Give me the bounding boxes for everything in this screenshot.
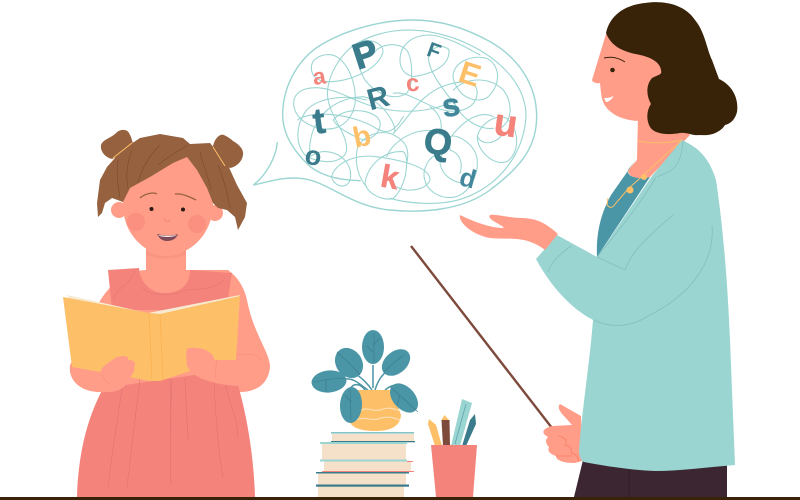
letters in bubble: [303, 31, 520, 196]
leaf lower left: [339, 386, 363, 424]
letter Q: Q: [421, 119, 455, 164]
outstretched hand: [460, 215, 558, 250]
cup body: [431, 445, 477, 497]
nose: [164, 218, 170, 222]
letter P: P: [348, 31, 383, 77]
mouth: [604, 95, 614, 102]
eye: [610, 68, 615, 72]
letter o: o: [303, 140, 324, 172]
leaf upper right: [377, 344, 415, 381]
hair: [606, 2, 737, 135]
yellow pencil: [428, 419, 442, 446]
dress folds: [108, 378, 237, 487]
teacher: [411, 2, 737, 497]
head: [122, 150, 213, 255]
plant stems: [345, 365, 400, 392]
hair buns: [101, 130, 133, 159]
second book: [322, 443, 406, 460]
leaf left: [311, 369, 347, 394]
hair strands: [117, 145, 230, 208]
letter t: t: [310, 100, 328, 142]
main hair: [97, 134, 247, 230]
pencil cup: [428, 399, 477, 497]
letter a: a: [311, 62, 327, 90]
scribble loops centre: [400, 35, 493, 129]
letter s: s: [440, 86, 462, 124]
neck shading: [146, 250, 186, 258]
neck and chest: [628, 115, 690, 178]
plant on books: [311, 330, 424, 497]
necklace: [607, 140, 682, 207]
eyebrows: [140, 193, 196, 200]
letter c: c: [405, 70, 420, 98]
face: [592, 34, 680, 121]
speech bubble with tangled scribble: [253, 20, 537, 211]
letter R: R: [363, 80, 393, 117]
scribble loops left: [294, 55, 457, 129]
fourth book: [318, 472, 406, 485]
teal blouse: [597, 158, 650, 257]
child: [63, 130, 270, 497]
flower pot: [350, 390, 401, 431]
letter u: u: [491, 101, 520, 146]
leaf lower right: [384, 378, 424, 418]
scribble loops right: [453, 57, 510, 130]
cheeks: [127, 213, 145, 231]
bubble outline: [253, 20, 537, 211]
right hand: [186, 348, 245, 386]
eyebrow: [604, 57, 625, 62]
third book: [324, 461, 411, 471]
eyes: [150, 207, 154, 211]
ears: [111, 202, 127, 218]
top book: [332, 434, 414, 442]
leaves: [311, 330, 424, 424]
book: [67, 295, 240, 318]
mouth: [157, 234, 178, 241]
bottom book: [318, 486, 404, 497]
leaf upper left: [329, 342, 369, 384]
letter E: E: [455, 54, 485, 94]
brown pencil: [442, 420, 450, 446]
dark pen: [462, 414, 476, 446]
leaf veins: [313, 333, 418, 420]
letter F: F: [424, 38, 444, 64]
floor line: [0, 497, 800, 500]
scribble loops bottom: [424, 136, 477, 197]
trousers: [574, 460, 727, 497]
letter b: b: [350, 120, 374, 155]
hair ties: [113, 143, 225, 166]
coat: [536, 140, 735, 471]
neck and arms: [70, 248, 270, 392]
book stack: [316, 432, 415, 497]
leaf top: [362, 330, 384, 364]
coat seams: [548, 141, 712, 325]
letter k: k: [378, 158, 402, 196]
left hand: [70, 356, 135, 392]
pointer stick: [411, 246, 552, 428]
ruler: [451, 399, 472, 446]
pointer hand: [543, 404, 582, 463]
dress collar pattern: [114, 270, 224, 300]
scribble inner ring: [352, 30, 526, 203]
letter d: d: [456, 161, 480, 195]
dress: [108, 268, 232, 310]
